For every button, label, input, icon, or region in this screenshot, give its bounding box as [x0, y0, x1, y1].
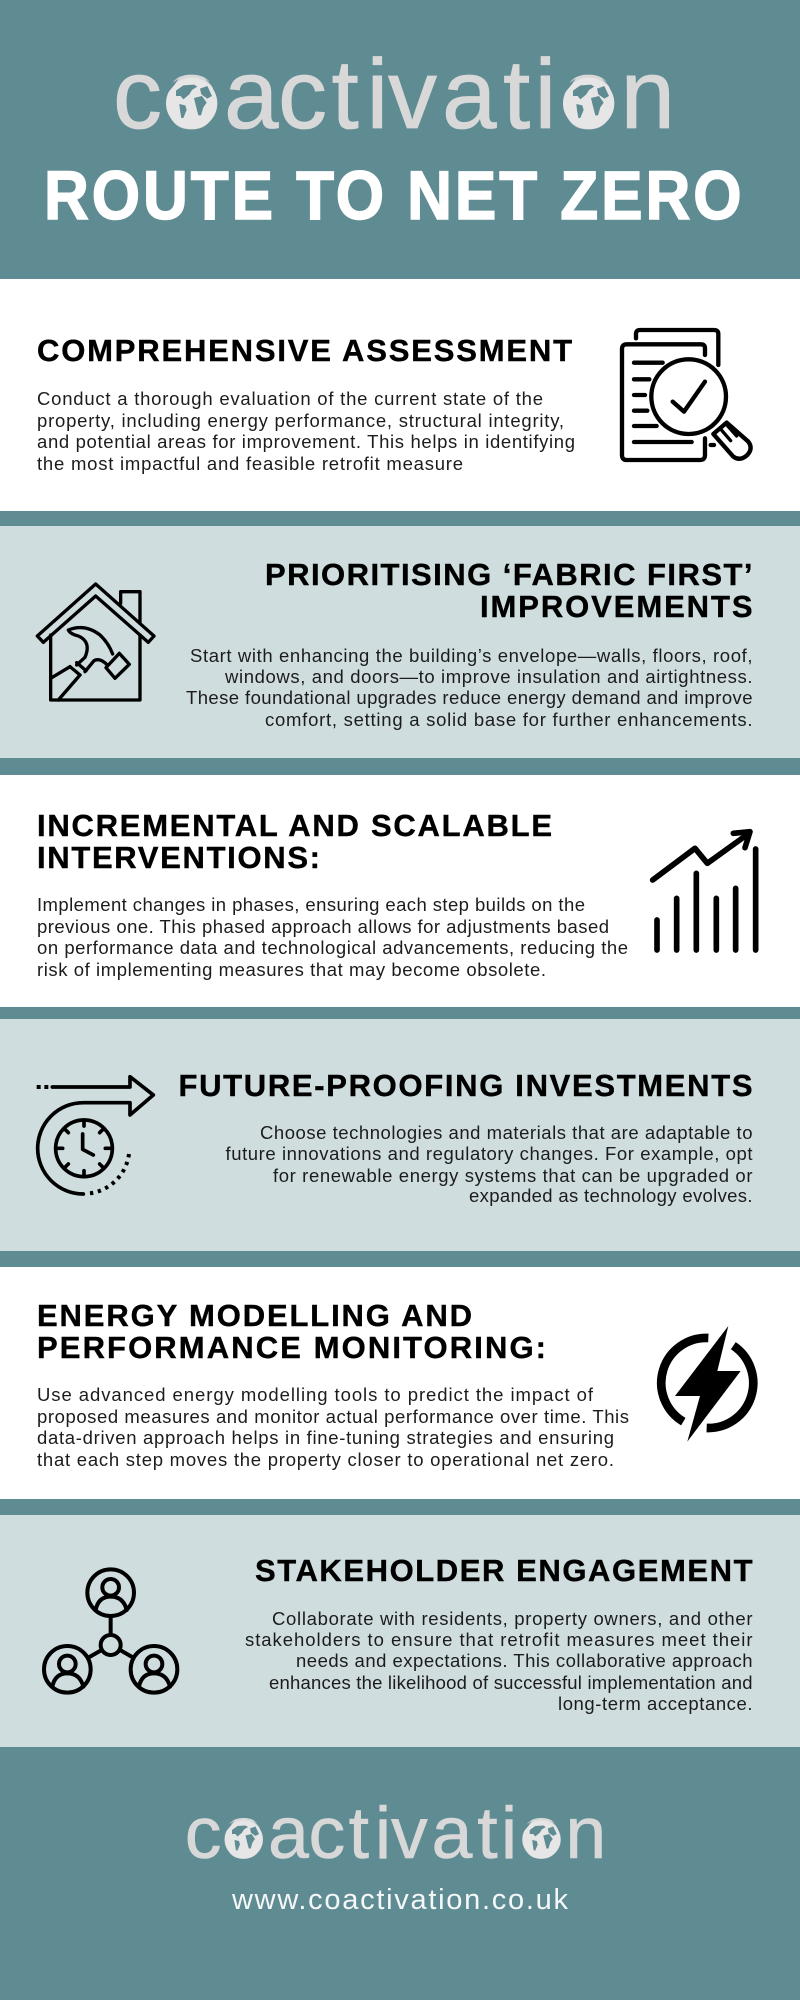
- icon: lightning bolt in ring: [661, 1326, 753, 1442]
- body text: and potential areas for improvement. This helps in identifying: [37, 431, 575, 452]
- title: ROUTE TO NET ZERO: [44, 157, 742, 234]
- body text: enhances the likelihood of successful implementation and: [269, 1672, 752, 1693]
- divider band: [0, 1251, 800, 1267]
- panel: prioritising fabric first: [0, 526, 800, 758]
- heading: [37, 808, 552, 875]
- panel: future-proofing investments: [0, 1019, 800, 1251]
- heading: INTERVENTIONS:: [37, 840, 320, 875]
- heading: STAKEHOLDER ENGAGEMENT: [255, 1553, 753, 1588]
- body text: [37, 388, 575, 474]
- body text: risk of implementing measures that may become obsolete.: [37, 959, 546, 980]
- body text: [245, 1608, 752, 1714]
- body text: proposed measures and monitor actual performance over time. This: [37, 1406, 629, 1427]
- panel: energy modelling and performance monitoring: [0, 1267, 800, 1499]
- body text: [186, 645, 752, 730]
- body text: Start with enhancing the building’s envelope—walls, floors, roof,: [190, 645, 752, 666]
- body text: the most impactful and feasible retrofit measure: [37, 453, 463, 474]
- icon: house with hammer: [37, 584, 154, 700]
- body text: [37, 1384, 629, 1470]
- body text: Use advanced energy modelling tools to predict the impact of: [37, 1384, 594, 1405]
- body text: comfort, setting a solid base for further enhancements.: [265, 709, 752, 730]
- logo: coactivation: coactivation: [113, 39, 675, 149]
- body text: [37, 894, 628, 980]
- icon: globe letter o: [166, 78, 217, 129]
- header band: [0, 0, 800, 279]
- body text: future innovations and regulatory changes. For example, opt: [226, 1143, 752, 1164]
- body text: previous one. This phased approach allows for adjustments based: [37, 916, 609, 937]
- heading: PRIORITISING ‘FABRIC FIRST’: [265, 557, 752, 592]
- body text: for renewable energy systems that can be upgraded or: [273, 1165, 752, 1186]
- heading: IMPROVEMENTS: [480, 589, 752, 624]
- website url: www.coactivation.co.uk: [231, 1884, 568, 1916]
- icon: rising bar chart with arrow: [653, 832, 756, 950]
- heading: [37, 1298, 546, 1365]
- body text: Implement changes in phases, ensuring each step builds on the: [37, 894, 585, 915]
- body text: expanded as technology evolves.: [469, 1185, 752, 1206]
- body text: [226, 1122, 752, 1206]
- body text: property, including energy performance, structural integrity,: [37, 410, 564, 431]
- divider band: [0, 511, 800, 526]
- panel: comprehensive assessment: [0, 279, 800, 511]
- heading: FUTURE-PROOFING INVESTMENTS: [178, 1068, 752, 1103]
- footer band: [0, 1747, 800, 2000]
- divider band: [0, 1499, 800, 1515]
- heading: [265, 557, 752, 624]
- divider band: [0, 758, 800, 775]
- heading: COMPREHENSIVE ASSESSMENT: [37, 333, 572, 368]
- body text: that each step moves the property closer to operational net zero.: [37, 1449, 614, 1470]
- icon: second globe letter o: [563, 78, 614, 129]
- body text: stakeholders to ensure that retrofit measures meet their: [245, 1629, 752, 1650]
- heading: PERFORMANCE MONITORING:: [37, 1330, 546, 1365]
- body text: long-term acceptance.: [558, 1693, 752, 1714]
- body text: needs and expectations. This collaborative approach: [296, 1650, 752, 1671]
- panel: stakeholder engagement: [0, 1515, 800, 1747]
- icon: connected people network: [44, 1569, 177, 1693]
- body text: Choose technologies and materials that are adaptable to: [260, 1122, 752, 1143]
- divider band: [0, 1007, 800, 1019]
- icon: second globe letter o: [522, 1820, 561, 1859]
- icon: document with magnifier: [622, 330, 751, 460]
- body text: Conduct a thorough evaluation of the current state of the: [37, 388, 543, 409]
- heading: ENERGY MODELLING AND: [37, 1298, 472, 1333]
- icon: globe letter o: [224, 1820, 263, 1859]
- body text: on performance data and technological advancements, reducing the: [37, 937, 628, 958]
- panel: incremental and scalable interventions: [0, 775, 800, 1007]
- icon: clock with forward arrow: [37, 1077, 153, 1194]
- heading: INCREMENTAL AND SCALABLE: [37, 808, 552, 843]
- body text: Collaborate with residents, property owners, and other: [272, 1608, 752, 1629]
- footer logo: coactivation: coactivation: [185, 1791, 606, 1874]
- body text: windows, and doors—to improve insulation and airtightness.: [224, 666, 752, 687]
- body text: These foundational upgrades reduce energy demand and improve: [186, 687, 752, 708]
- body text: data-driven approach helps in fine-tuning strategies and ensuring: [37, 1427, 614, 1448]
